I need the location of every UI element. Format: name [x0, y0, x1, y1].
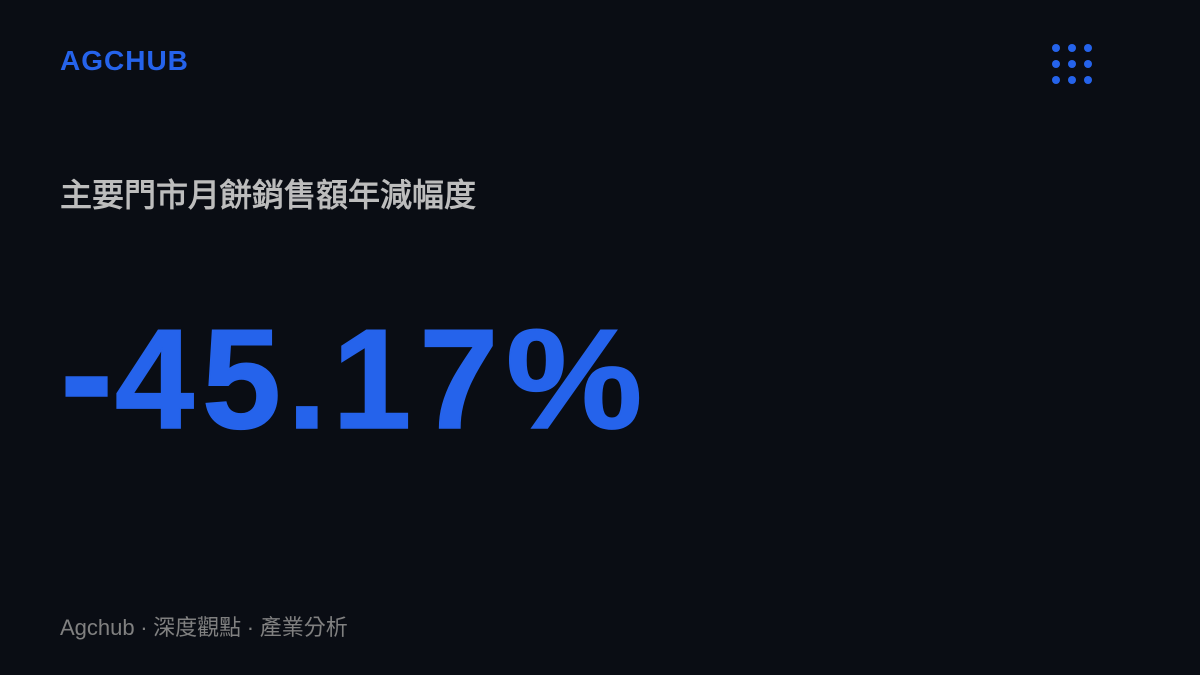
big number: .: [287, 300, 332, 459]
big number: -: [60, 283, 115, 462]
big number: %: [506, 300, 651, 459]
big number: 5: [202, 300, 287, 459]
icon: dot grid: [1052, 44, 1092, 84]
brand name: AGCHUB: [60, 45, 189, 76]
heading: 主要門市月餅銷售額年減幅度: [60, 177, 476, 213]
footer text: Agchub · 深度觀點 · 產業分析: [60, 615, 348, 640]
big number: 4 17: [115, 300, 506, 459]
big number: [60, 283, 651, 462]
